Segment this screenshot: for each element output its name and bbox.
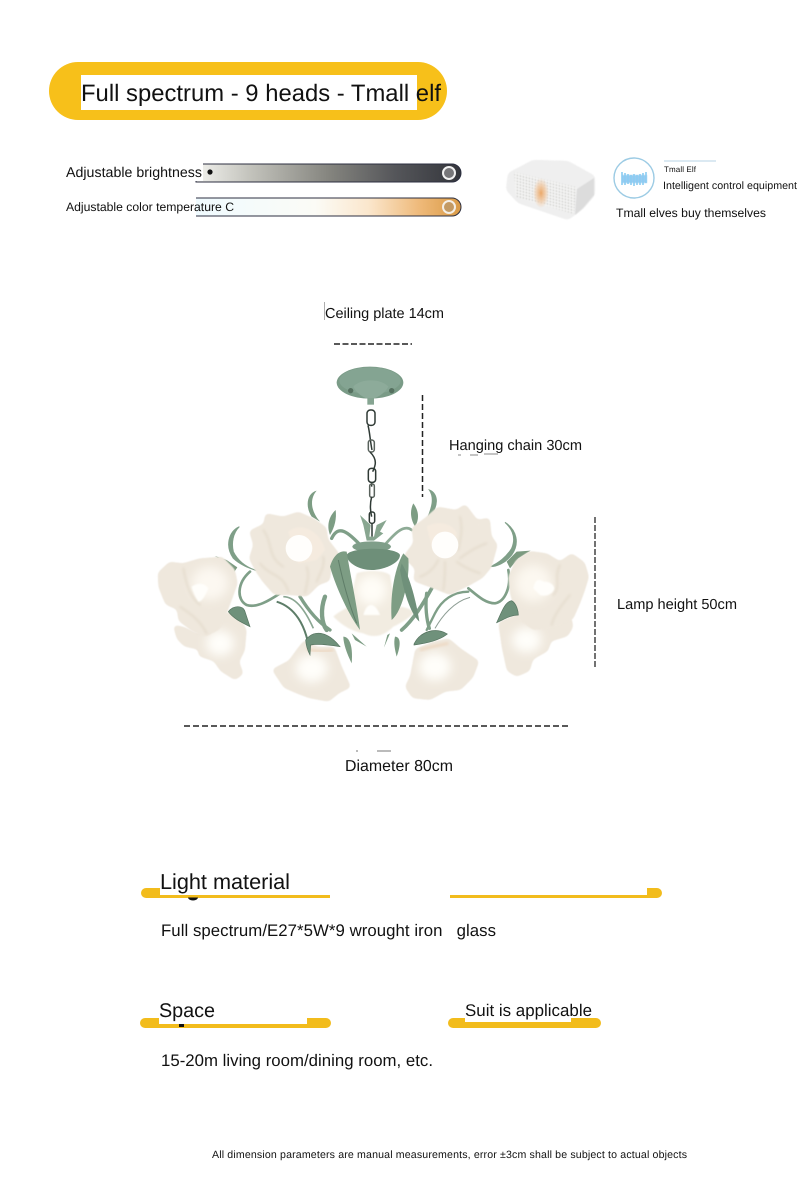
Tmall Elf product text: Tmall elves buy themselves [616, 206, 766, 220]
section: light material: Light material [160, 869, 290, 894]
right stems [382, 490, 531, 630]
brightness slider [60, 160, 461, 182]
section: suit is applicable [448, 1001, 601, 1028]
left flower caps [228, 607, 340, 655]
bottom right flower [407, 640, 477, 698]
hanging chain [367, 410, 376, 537]
dimension: ceiling plate [324, 302, 444, 344]
title banner [49, 62, 447, 120]
section: light material: Full spectrum/E27*5W*9 wrought iron glass [161, 921, 496, 940]
far left flower [159, 558, 236, 635]
centre flower [333, 571, 413, 636]
long leaves [330, 551, 419, 663]
brightness slider: Adjustable brightness [66, 165, 202, 181]
back right flower [500, 615, 572, 675]
section: space: Space [159, 1000, 215, 1022]
colour temperature slider [66, 198, 461, 216]
icon: voice wave circle [614, 158, 654, 198]
colour temperature slider: Adjustable color temperature C [66, 200, 234, 214]
upper left flower [251, 513, 338, 595]
ceiling plate [337, 367, 403, 405]
Tmall Elf product text: Tmall Elf [664, 165, 697, 174]
bottom left flower [274, 642, 349, 700]
section: suit is applicable: Suit is applicable [465, 1001, 592, 1020]
footer note: All dimension parameters are manual measurements, error ±3cm shall be subject to actual objects [212, 1149, 687, 1161]
back left flower [175, 613, 245, 678]
title banner: Full spectrum - 9 heads - Tmall elf [81, 80, 441, 107]
Tmall Elf product text: Intelligent control equipment [663, 180, 797, 192]
dimension: diameter: Diameter 80cm [345, 758, 453, 775]
left stems [215, 491, 363, 655]
dimension: hanging chain: Hanging chain 30cm [449, 438, 582, 454]
section: light material [141, 869, 662, 940]
central hub and small leaves [347, 515, 400, 570]
dimension: lamp height: Lamp height 50cm [617, 597, 737, 613]
chandelier illustration [159, 367, 587, 700]
section: space [140, 1000, 433, 1070]
upper right flower [405, 506, 496, 593]
right flower caps [414, 601, 518, 645]
dimension: ceiling plate: Ceiling plate 14cm [325, 306, 444, 322]
icon: smart speaker [506, 160, 595, 220]
section: space: 15-20m living room/dining room, etc. [161, 1051, 433, 1070]
far right flower [510, 553, 587, 628]
Tmall Elf product text [616, 161, 797, 220]
